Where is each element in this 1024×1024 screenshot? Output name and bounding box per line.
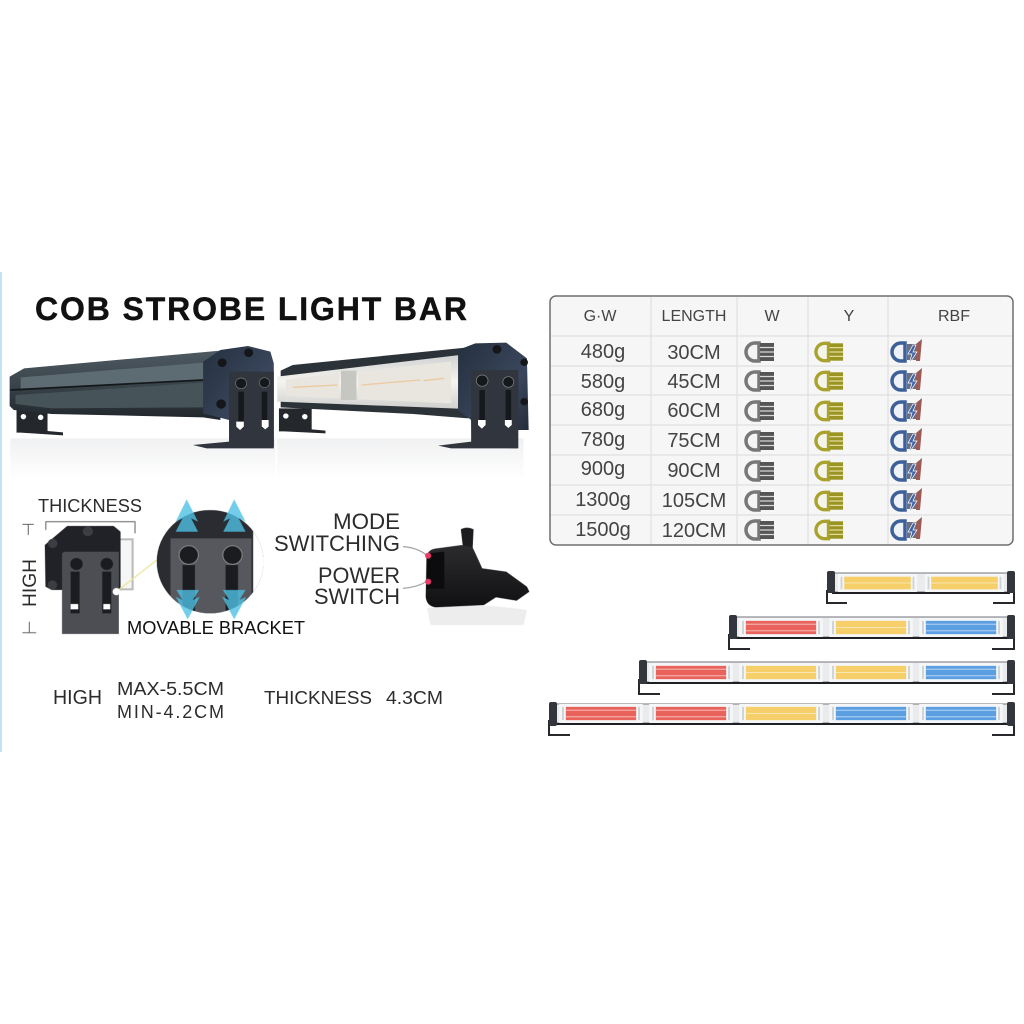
switch labels: MODE: [333, 509, 400, 534]
weight column: 1300g: [575, 489, 631, 511]
table header: Y: [844, 308, 855, 325]
length column: 120CM: [662, 520, 726, 542]
right light bar, lit lens: [277, 343, 529, 448]
bracket labels: [20, 496, 305, 638]
product photo: two light bars: [10, 343, 529, 480]
adjustment arrows down: [176, 590, 246, 619]
dimensions text: HIGH: [53, 687, 102, 709]
switch labels: [274, 509, 400, 609]
length column: 60CM: [667, 400, 721, 422]
2 segment bar: [827, 571, 1015, 603]
reflection under bars: [10, 438, 523, 480]
bracket labels: THICKNESS: [38, 496, 142, 516]
weight column: [575, 341, 631, 541]
4 segment bar: [639, 660, 1015, 694]
title: COB STROBE LIGHT BAR: [35, 291, 467, 327]
length column: 45CM: [667, 371, 721, 393]
dimensions text: 4.3CM: [386, 688, 443, 708]
left edge accent strip: [0, 272, 2, 752]
weight column: 1500g: [575, 519, 631, 541]
dimensions text: THICKNESS: [264, 688, 372, 708]
bracket detail diagram: [22, 499, 529, 634]
3 segment bar: [729, 615, 1015, 649]
weight column: 900g: [581, 458, 625, 480]
table header: RBF: [938, 308, 970, 325]
magnified circle: [157, 499, 263, 619]
table header: [584, 308, 970, 325]
car plug switch: [403, 528, 529, 625]
light bar lengths: [549, 571, 1015, 735]
red blue flash icons: [892, 339, 922, 542]
length column: 30CM: [667, 342, 721, 364]
switch labels: POWER: [318, 563, 400, 588]
white light icons: [746, 343, 774, 539]
bracket labels: MOVABLE BRACKET: [127, 618, 305, 638]
table header: W: [764, 308, 780, 325]
specification table: [550, 296, 1013, 545]
weight column: 580g: [581, 371, 625, 393]
adjustment arrows up: [176, 499, 246, 532]
end cap with bracket: [45, 526, 133, 634]
bracket labels: HIGH: [20, 559, 41, 607]
length column: 105CM: [662, 490, 726, 512]
length column: [662, 342, 726, 542]
weight column: 780g: [581, 429, 625, 451]
thickness dimension bracket: [46, 522, 135, 533]
dimensions text: MAX-5.5CM: [117, 679, 224, 699]
dimensions text: MIN-4.2CM: [117, 702, 224, 722]
high dimension bracket: [22, 524, 36, 633]
left light bar, closed: [10, 346, 274, 448]
table header: LENGTH: [662, 308, 726, 325]
weight column: 480g: [581, 341, 625, 363]
yellow light icons: [816, 343, 843, 539]
callout connector: [113, 550, 168, 595]
5 segment bar: [549, 702, 1015, 735]
dimensions text: [53, 679, 443, 722]
weight column: 680g: [581, 399, 625, 421]
switch labels: SWITCHING: [274, 531, 400, 556]
length column: 90CM: [667, 460, 721, 482]
table header: G·W: [584, 308, 617, 325]
length column: 75CM: [667, 430, 721, 452]
switch labels: SWITCH: [314, 584, 400, 609]
